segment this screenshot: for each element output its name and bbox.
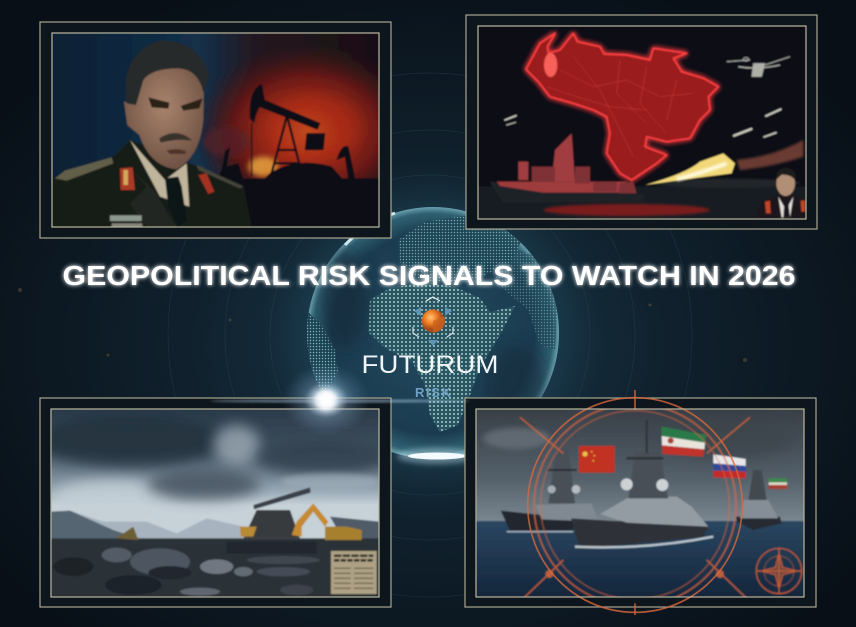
- rocky ground: [51, 538, 379, 597]
- africa dotted landmass: [368, 282, 515, 432]
- glowing disc under globe: [397, 448, 477, 464]
- panel frame: [465, 398, 816, 607]
- panel inner border: [51, 409, 379, 597]
- panel image: [478, 26, 806, 220]
- panel: Venezuela map and naval strike: [466, 15, 817, 229]
- panel image: [37, 409, 390, 597]
- rocket flame and smoke: [645, 140, 803, 185]
- icon: excavator: [292, 503, 362, 540]
- europe dotted landmass: [398, 215, 525, 282]
- newspaper clipping: [331, 551, 377, 594]
- icon: drilling rig: [227, 487, 317, 554]
- title: GEOPOLITICAL RISK SIGNALS TO WATCH IN 2026: [62, 260, 796, 291]
- panel frame: [40, 22, 391, 238]
- logo mark: orange orb with brackets: [413, 297, 453, 346]
- flag: small right: [769, 478, 787, 489]
- logo: Futurum Risk: [362, 297, 498, 400]
- panel image: [52, 33, 380, 232]
- map: Venezuela glowing outline: [526, 33, 718, 180]
- panel: mining site under storm clouds: [37, 398, 391, 607]
- panel frame: [40, 398, 391, 607]
- panel: leader and oil field: [40, 22, 391, 238]
- logo sub-label: RISK: [415, 385, 452, 400]
- warship right: [736, 470, 782, 530]
- inset portrait: [764, 168, 806, 218]
- panel: allied warships and targeting reticle: [465, 390, 816, 615]
- globe: [293, 193, 573, 473]
- icon: missiles: [505, 109, 781, 137]
- warship in red light: [489, 132, 638, 195]
- south america dotted landmass: [307, 312, 338, 391]
- flag: Iran: [662, 427, 706, 457]
- warship left: [500, 454, 596, 531]
- uniformed figure: [52, 140, 252, 227]
- panel inner border: [52, 33, 379, 227]
- distant mountains: [74, 512, 244, 540]
- hair: [126, 41, 209, 105]
- asia dotted landmass: [495, 245, 558, 350]
- icon: drone: [727, 57, 790, 77]
- panel inner border: [478, 26, 806, 219]
- panel inner border: [476, 409, 804, 597]
- flag: China: [579, 446, 615, 473]
- icon: pumpjack silhouette: [217, 84, 355, 180]
- targeting reticle: [520, 404, 750, 606]
- flag: Russia: [713, 454, 746, 478]
- panel frame: [466, 15, 817, 229]
- logo wordmark: FUTURUM: [362, 351, 498, 379]
- lens flare: [210, 364, 470, 436]
- panel image: [476, 390, 804, 615]
- warship centre: [507, 420, 713, 549]
- face: [124, 64, 204, 169]
- icon: compass rose: [756, 548, 802, 594]
